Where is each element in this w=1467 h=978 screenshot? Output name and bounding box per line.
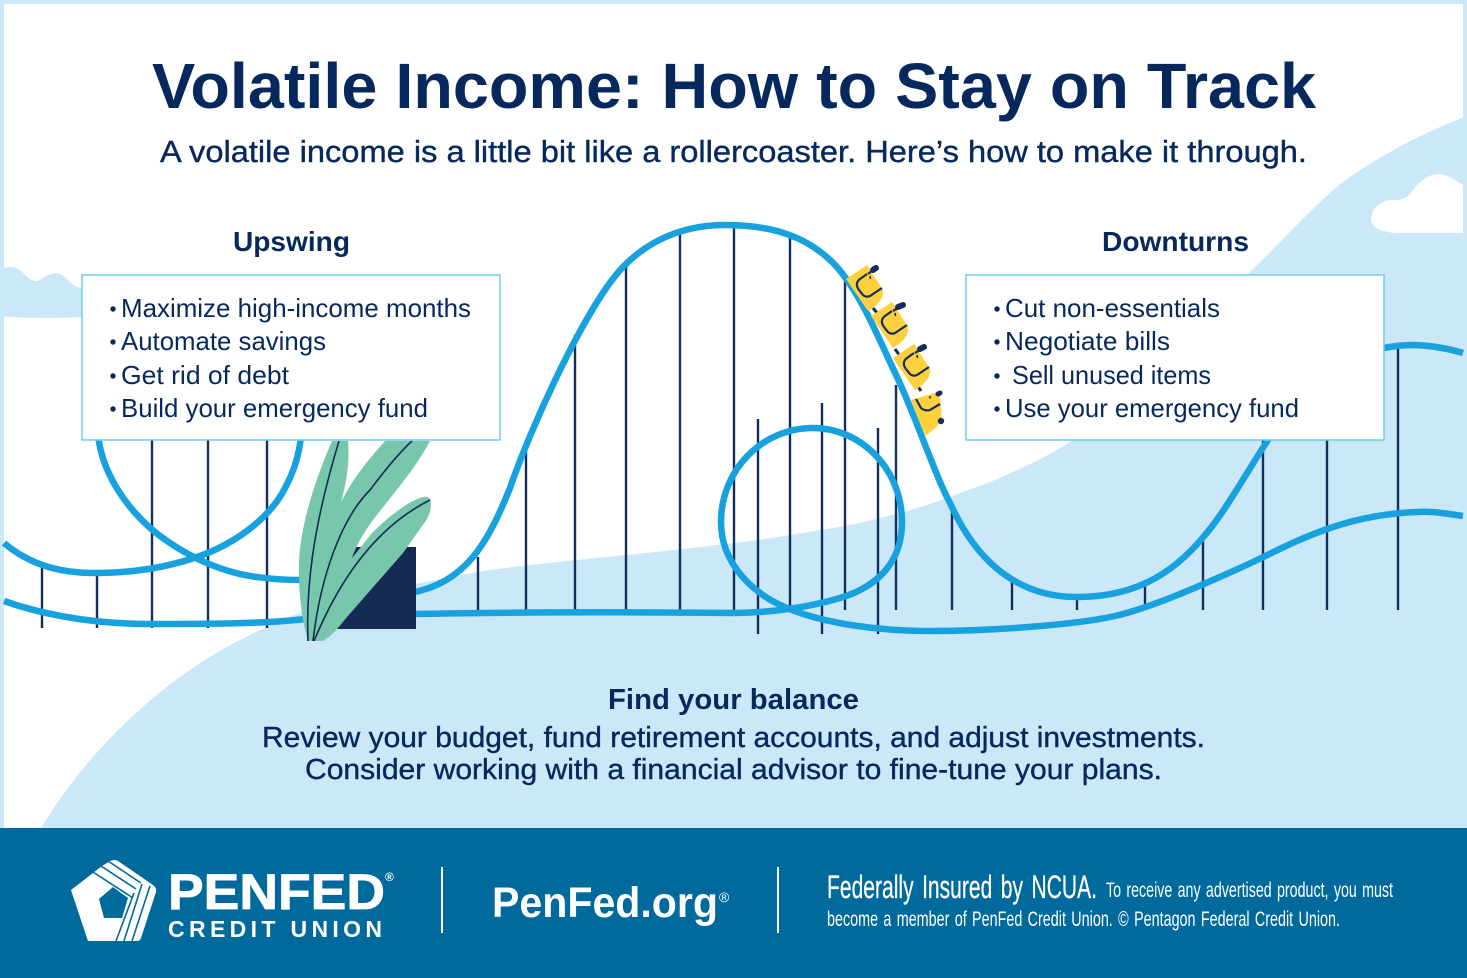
- downturns list: Sell unused items: [1012, 360, 1211, 390]
- upswing list: [110, 293, 471, 423]
- panel: downturns: [966, 226, 1384, 440]
- website: ®: [719, 889, 730, 905]
- disclaimer: Federally Insured by NCUA.: [827, 869, 1097, 905]
- balance line 2: Consider working with a financial advisor to fine-tune your plans.: [305, 754, 1162, 786]
- panel: upswing: [82, 226, 500, 440]
- downturns list: [994, 293, 1299, 423]
- left curve track B: [98, 435, 303, 580]
- car 2: [871, 302, 908, 348]
- upswing list: Build your emergency fund: [121, 393, 428, 423]
- downturns list: Cut non-essentials: [1005, 293, 1220, 323]
- car 4: [911, 392, 944, 436]
- leaves: [299, 441, 431, 641]
- disclaimer: [827, 869, 1393, 931]
- car 1: [846, 265, 883, 311]
- upswing list: Automate savings: [121, 326, 326, 356]
- divider 1: [441, 867, 443, 933]
- PENFED wordmark: [168, 864, 394, 942]
- coaster track: [4, 225, 1463, 631]
- balance line 1: Review your budget, fund retirement accounts, and adjust investments.: [262, 722, 1205, 754]
- upswing list: Get rid of debt: [121, 360, 290, 390]
- leaf veins: [308, 441, 430, 641]
- PENFED wordmark: PENFED: [168, 864, 385, 920]
- title: Volatile Income: How to Stay on Track: [152, 50, 1316, 122]
- downturns box: [966, 275, 1384, 440]
- PENFED wordmark: ®: [385, 870, 394, 884]
- balance heading: Find your balance: [608, 684, 859, 716]
- heading: downturns: Downturns: [1102, 226, 1249, 257]
- background hill: [40, 116, 1467, 830]
- divider 2: [777, 867, 779, 933]
- connectors: [873, 308, 921, 391]
- downturns list: Use your emergency fund: [1005, 393, 1299, 423]
- cloud right: [1371, 174, 1463, 233]
- main hill track: [410, 225, 1463, 597]
- left lower track: [4, 601, 305, 624]
- subtitle: A volatile income is a little bit like a rollercoaster. Here’s how to make it through.: [160, 134, 1307, 169]
- website: PenFed.org: [492, 879, 718, 927]
- coaster cars: [846, 265, 944, 436]
- upswing list: Maximize high-income months: [121, 293, 471, 323]
- find your balance text block: [262, 684, 1205, 786]
- cloud left: [0, 267, 84, 318]
- icon: PenFed pentagon logo: [71, 860, 156, 941]
- left curve track A: [4, 435, 301, 573]
- dark block: [334, 547, 416, 629]
- car 3: [893, 344, 930, 390]
- plant: [299, 441, 431, 641]
- heading: upswing: Upswing: [233, 226, 350, 257]
- footer band: [0, 828, 1467, 978]
- roller coaster support posts: [42, 226, 1398, 634]
- PENFED wordmark: CREDIT UNION: [168, 916, 382, 942]
- loop and lower track: [416, 428, 1463, 631]
- downturns list: Negotiate bills: [1005, 326, 1170, 356]
- upswing box: [82, 275, 500, 440]
